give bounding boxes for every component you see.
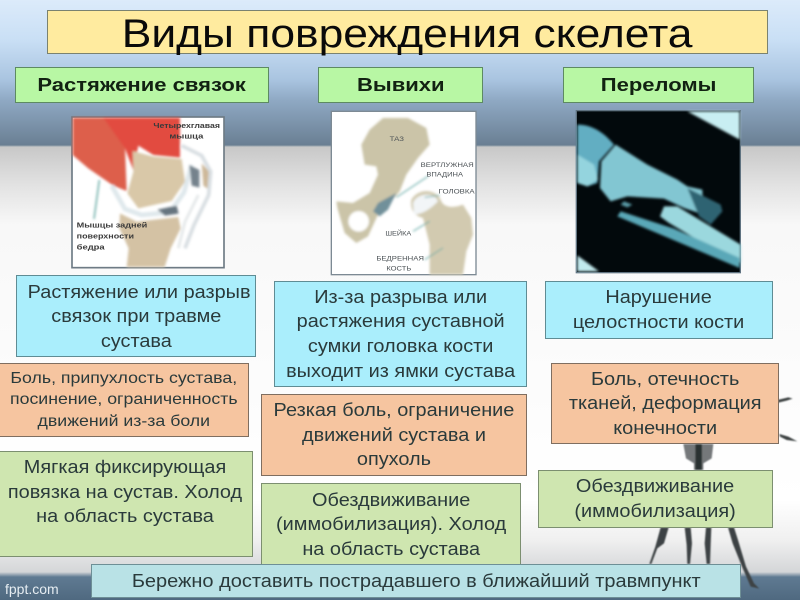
symptoms: fractures: Боль, отечность — [591, 369, 739, 389]
definition: sprains: Растяжение или разрыв — [27, 282, 250, 302]
definition: sprains — [16, 275, 256, 357]
definition: dislocations — [274, 281, 527, 387]
definition: sprains: сустава — [101, 331, 171, 351]
definition: fractures — [545, 281, 773, 339]
hip labels: БЕДРЕННАЯ — [376, 256, 424, 263]
knee labels: бедра — [77, 244, 105, 252]
heading: sprains — [15, 67, 269, 103]
image: knee joint — [70, 116, 225, 268]
first aid: sprains — [0, 451, 253, 557]
hip labels: КОСТЬ — [386, 265, 412, 272]
definition: dislocations: сумки головка кости — [308, 336, 493, 356]
title: Виды повреждения скелета — [122, 12, 693, 56]
symptoms: sprains: Боль, припухлость сустава, — [10, 370, 237, 387]
symptoms: fractures — [551, 363, 779, 444]
first aid: dislocations — [261, 483, 521, 566]
symptoms: fractures: конечности — [613, 418, 717, 438]
image: hip joint — [330, 110, 477, 276]
knee labels: поверхности — [77, 234, 134, 241]
hip labels — [376, 136, 475, 272]
definition: fractures: целостности кости — [573, 312, 745, 332]
skeleton figure behind boxes — [648, 396, 798, 589]
hip labels: ГОЛОВКА — [439, 189, 475, 196]
first aid: sprains: на область сустава — [37, 506, 214, 526]
symptoms: sprains: посинение, ограниченность — [10, 391, 237, 408]
definition: dislocations: Из-за разрыва или — [314, 287, 487, 307]
heading: sprains: Растяжение связок — [38, 74, 246, 95]
footer note: Бережно доставить пострадавшего в ближайший травмпункт — [132, 570, 700, 590]
first aid: sprains: повязка на сустав. Холод — [8, 482, 243, 502]
knee labels: Четырехглавая — [153, 123, 220, 130]
symptoms: dislocations: Резкая боль, ограничение — [274, 400, 514, 420]
first aid: fractures — [538, 470, 773, 528]
definition: fractures: Нарушение — [606, 287, 712, 307]
first aid: dislocations: Обездвиживание — [312, 490, 470, 510]
heading: fractures: Переломы — [601, 74, 716, 95]
knee labels: Мышцы задней — [77, 222, 147, 230]
symptoms: dislocations: опухоль — [357, 449, 431, 469]
first aid: fractures: (иммобилизация) — [575, 501, 736, 521]
symptoms: dislocations: движений сустава и — [302, 425, 486, 445]
symptoms: fractures: тканей, деформация — [569, 393, 761, 413]
symptoms: dislocations — [261, 394, 527, 476]
hip labels: ШЕЙКА — [385, 229, 412, 238]
definition: dislocations: растяжения суставной — [296, 311, 504, 331]
first aid: fractures: Обездвиживание — [576, 476, 735, 496]
first aid: sprains: Мягкая фиксирующая — [24, 457, 227, 477]
knee labels: мышца — [169, 133, 203, 140]
hip labels: ВПАДИНА — [426, 171, 464, 178]
knee labels — [77, 123, 220, 252]
first aid: dislocations: на область сустава — [302, 539, 480, 559]
heading: dislocations — [318, 67, 483, 103]
symptoms: sprains: движений из-за боли — [37, 413, 210, 430]
watermark: fppt.com — [5, 581, 59, 597]
first aid: dislocations: (иммобилизация). Холод — [276, 514, 506, 534]
definition: sprains: связок при травме — [51, 306, 221, 326]
heading: fractures — [563, 67, 754, 103]
definition: dislocations: выходит из ямки сустава — [286, 361, 515, 381]
footer note — [91, 564, 741, 598]
image: fracture x-ray — [576, 110, 742, 274]
heading: dislocations: Вывихи — [357, 74, 444, 95]
symptoms: sprains — [0, 363, 249, 437]
hip labels: ТАЗ — [390, 136, 404, 143]
hip labels: ВЕРТЛУЖНАЯ — [421, 162, 474, 169]
